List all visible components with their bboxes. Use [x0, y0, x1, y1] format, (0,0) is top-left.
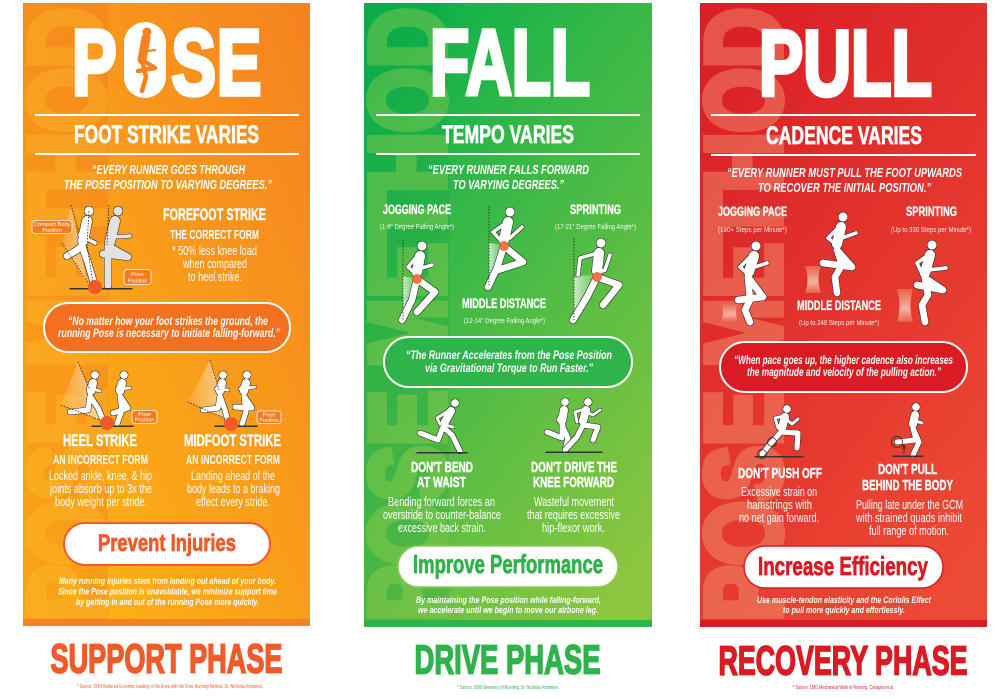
illustration: jogging runner with step — [721, 242, 767, 322]
text: forefoot strike: when compared — [182, 257, 247, 271]
quote: “EVERY RUNNER GOES THROUGH — [92, 162, 245, 177]
label: pose position — [124, 270, 151, 284]
text: midfoot strike: MIDFOOT STRIKE — [184, 431, 281, 450]
text: don't drive: KNEE FORWARD — [533, 474, 614, 491]
callout: pose necessary: running Pose is necessary to initiate falling-forward.” — [58, 326, 280, 340]
text: don't push off: no net gain forward. — [739, 511, 819, 525]
text: sprinting: SPRINTING — [570, 201, 621, 217]
label: pose position midfoot — [257, 411, 281, 424]
text: don't pull: with strained quads inhibit — [855, 511, 962, 525]
text: heel strike: AN INCORRECT FORM — [53, 453, 148, 467]
text: forefoot strike: FOREFOOT STRIKE — [163, 205, 266, 224]
title: FALL: FALL — [430, 10, 590, 114]
text: forefoot strike: to heel strike. — [188, 270, 242, 284]
panel: pull recovery phase — [685, 3, 987, 627]
illustration: jogging runner — [402, 240, 435, 320]
text: don't bend: excessive back strain. — [398, 521, 486, 535]
label: pose position heel: Pose — [138, 412, 151, 418]
source: support: * Source: 2004 Reduced Eccentric Loading of the Knee with the Pose Running Method, Dr. Nicholas Romanov. — [77, 684, 263, 690]
button: improve performance: Improve Performance — [413, 549, 603, 579]
callout: runner accelerates — [384, 337, 632, 387]
text: midfoot strike: Landing ahead of the — [191, 469, 275, 483]
quote — [64, 162, 272, 192]
text: sprinting: (17-21° Degree Falling Angle*) — [555, 222, 636, 231]
text: jogging pace: (180+ Steps per Minute*) — [718, 225, 787, 234]
text: heel strike: HEEL STRIKE — [63, 431, 137, 450]
text: don't drive: Wasteful movement — [534, 495, 614, 509]
text: don't push off: Excessive strain on — [741, 485, 817, 499]
text: don't bend — [383, 459, 501, 535]
callout: higher cadence — [720, 342, 967, 392]
bottom band — [700, 620, 987, 627]
illustration: don't bend at waist — [417, 399, 467, 453]
text: support note: Many running injuries stem from landing out ahead of your body. — [59, 576, 276, 587]
phase title: support: SUPPORT PHASE — [50, 636, 282, 682]
illustration: middle distance runner with step — [805, 212, 856, 293]
text: don't pull: BEHIND THE BODY — [862, 477, 953, 494]
text: middle distance — [797, 297, 881, 327]
illustration: midfoot strike runners — [188, 360, 257, 431]
illustration: don't pull behind body — [892, 403, 923, 456]
panel background green — [364, 3, 652, 627]
text: jogging pace — [380, 201, 454, 231]
title: PULL: PULL — [759, 11, 932, 115]
text: drive note — [416, 595, 601, 616]
text: don't bend: overstride to counter-balance — [383, 508, 501, 522]
text: middle distance: (Up to 240 Steps per Minute*) — [799, 318, 879, 327]
bottom band — [23, 619, 310, 626]
text: support note — [58, 576, 278, 608]
text: forefoot strike: THE CORRECT FORM — [170, 228, 259, 242]
text: recovery note: to pull more quickly and effortlessly. — [783, 605, 905, 616]
text: don't push off — [738, 465, 822, 525]
text: drive note: By maintaining the Pose position while falling-forward, — [416, 595, 601, 606]
source: recovery: * Source: 1991 Mechanical Work in Running, Cavagna et al. — [793, 685, 894, 691]
text: forefoot strike — [163, 205, 266, 284]
text: recovery note — [757, 595, 932, 616]
text: heel strike: Locked ankle, knee, & hip — [49, 469, 152, 483]
text: don't pull: full range of motion. — [869, 524, 949, 538]
text: heel strike: joints absorb up to 3x the — [49, 482, 152, 496]
text: don't pull — [855, 461, 963, 538]
illustration: don't drive knee forward — [546, 398, 602, 452]
text: heel strike — [49, 431, 152, 509]
label: pose position: Pose — [131, 272, 144, 278]
text: midfoot strike: AN INCORRECT FORM — [186, 453, 280, 467]
text: support note: by getting in and out of the running Pose more quickly. — [76, 597, 259, 608]
text: midfoot strike: body leads to a braking — [187, 482, 280, 496]
heading: tempo varies: TEMPO VARIES — [442, 121, 574, 149]
quote: TO RECOVER THE INITIAL POSITION.” — [758, 180, 931, 195]
callout: pose necessary — [44, 303, 290, 352]
quote: TO VARYING DEGREES.” — [453, 177, 564, 192]
text: midfoot strike — [184, 431, 281, 509]
text: don't bend: DON'T BEND — [411, 459, 473, 476]
callout: pose necessary: “No matter how your foot strikes the ground, the — [68, 314, 268, 328]
label: pose position: Position — [128, 278, 147, 284]
illustration: don't push off — [755, 405, 803, 458]
illustration: forefoot strike runners — [62, 205, 132, 294]
button: increase efficiency — [744, 546, 943, 588]
text: don't drive: DON'T DRIVE THE — [531, 459, 617, 476]
text: sprinting: (Up to 330 Steps per Minute*) — [891, 225, 971, 234]
phase title: drive: DRIVE PHASE — [414, 636, 600, 682]
label: pose position heel: Position — [135, 418, 154, 424]
illustration: heel strike runners — [61, 362, 133, 430]
illustration: middle distance runner — [488, 206, 523, 287]
text: drive note: we accelerate until we begin to move our airbone leg. — [418, 605, 598, 616]
text: sprinting — [891, 203, 971, 234]
text: don't push off: DON'T PUSH OFF — [738, 465, 822, 482]
label: compact body position: Compact Body — [34, 222, 70, 228]
heading: foot strike varies: FOOT STRIKE VARIES — [74, 121, 259, 149]
quote — [428, 162, 589, 192]
quote — [727, 165, 962, 195]
text: sprinting: SPRINTING — [906, 203, 957, 219]
quote: THE POSE POSITION TO VARYING DEGREES.” — [64, 177, 272, 192]
label: pose position heel — [132, 410, 157, 424]
panel: fall drive phase — [349, 3, 652, 627]
panel background red — [700, 3, 987, 627]
panel: pose support phase — [8, 3, 310, 626]
label: pose position midfoot: Position — [259, 418, 279, 424]
callout: runner accelerates: “The Runner Accelerates from the Pose Position — [406, 348, 612, 362]
text: heel strike: body weight per stride. — [55, 495, 147, 509]
label: compact body position — [32, 220, 72, 234]
text: don't pull: DON'T PULL — [878, 461, 937, 478]
illustration: sprinting runner with step — [897, 240, 946, 322]
text: recovery note: Use muscle-tendon elasticity and the Coriolis Effect — [757, 595, 932, 606]
title: POSE: POSE — [72, 12, 261, 115]
button: improve performance — [398, 546, 618, 587]
text: middle distance: MIDDLE DISTANCE — [462, 295, 546, 311]
text: jogging pace: (1-8° Degree Falling Angle*) — [380, 222, 454, 231]
button: prevent injuries: Prevent Injuries — [98, 530, 236, 557]
text: midfoot strike: effect every stride. — [196, 495, 270, 509]
text: don't bend: Bending forward forces an — [388, 495, 495, 509]
label: compact body position: Position — [42, 228, 62, 234]
illustration: sprinting runner — [573, 238, 619, 320]
source: drive: * Source: 2000 Geometry of Running, Dr. Nicholas Romanov. — [457, 685, 559, 691]
text: jogging pace — [718, 203, 787, 234]
panel background orange — [23, 3, 310, 626]
text: don't drive: hip-flexor work. — [542, 521, 605, 535]
text: middle distance: (12-14° Degree Falling Angle*) — [464, 316, 545, 325]
text: middle distance — [462, 295, 546, 325]
button: prevent injuries — [64, 523, 270, 565]
heading: cadence varies: CADENCE VARIES — [766, 122, 922, 150]
label: pose position midfoot: Pose — [263, 412, 275, 418]
text: don't drive: that requires excessive — [527, 508, 620, 522]
button: increase efficiency: Increase Efficiency — [758, 551, 928, 581]
text: don't push off: hamstrings with — [747, 498, 812, 512]
quote: “EVERY RUNNER FALLS FORWARD — [428, 162, 589, 177]
text: don't bend: AT WAIST — [417, 474, 466, 491]
text: sprinting — [555, 201, 636, 231]
text: forefoot strike: * 50% less knee load — [172, 244, 257, 258]
bottom band — [364, 620, 652, 627]
text: middle distance: MIDDLE DISTANCE — [797, 297, 881, 313]
text: don't drive — [527, 459, 620, 535]
callout: runner accelerates: via Gravitational Torque to Run Faster.” — [425, 361, 593, 375]
text: support note: Since the Pose position is unavoidable, we minimize support time — [58, 586, 278, 598]
text: jogging pace: JOGGING PACE — [718, 203, 787, 219]
text: jogging pace: JOGGING PACE — [383, 201, 451, 217]
